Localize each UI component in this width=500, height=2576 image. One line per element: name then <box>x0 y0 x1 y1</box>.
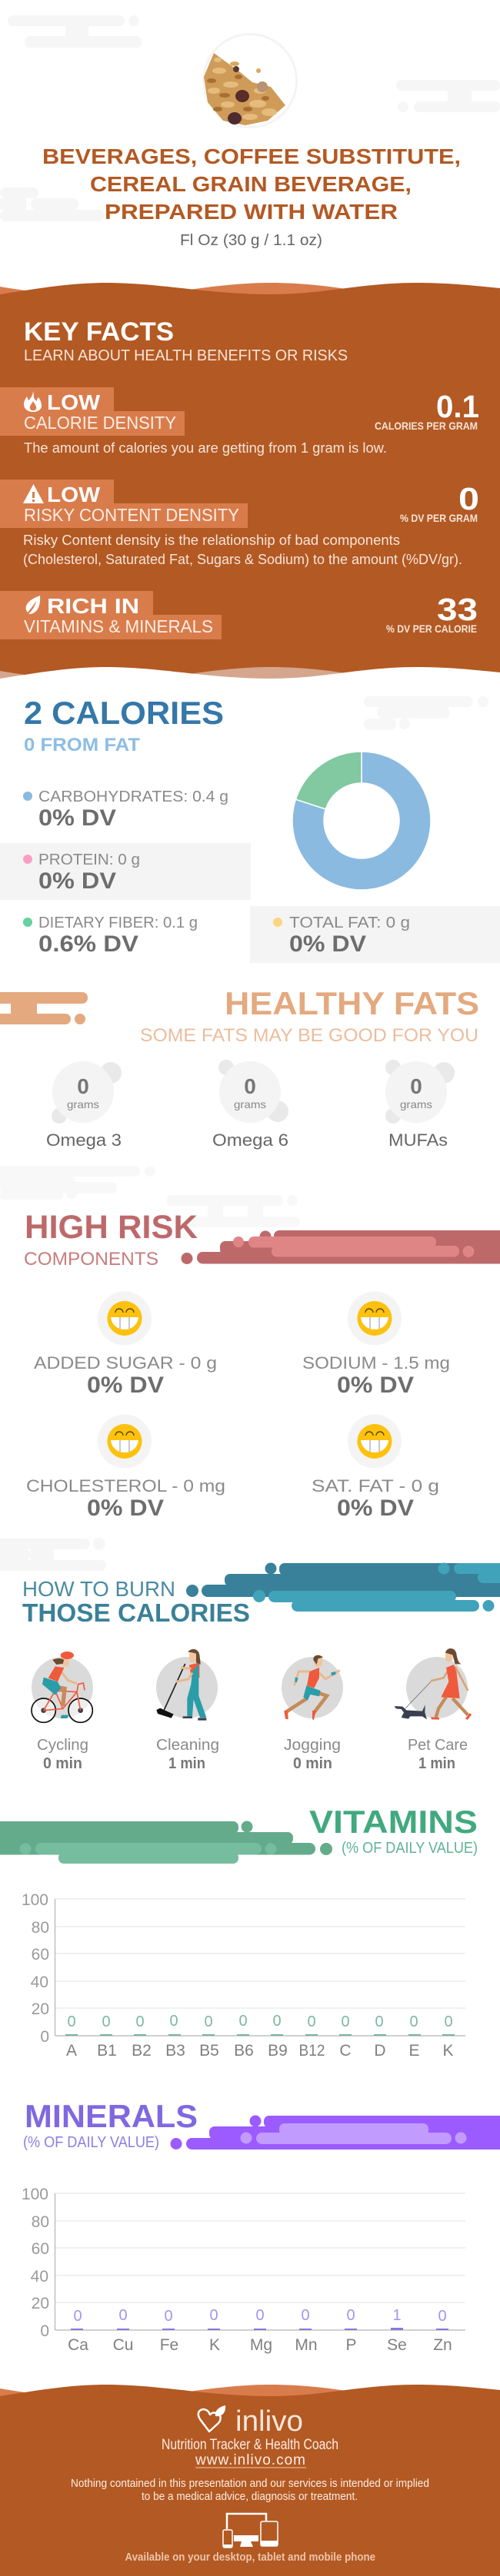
donut chart <box>292 752 431 890</box>
title: CEREAL GRAIN BEVERAGE, <box>90 172 412 196</box>
item: sodium: SODIUM - 1.5 mg <box>302 1353 450 1373</box>
heading: calories: 2 CALORIES <box>24 695 224 731</box>
bar chart: vitamins <box>22 1891 465 2060</box>
bar chart: minerals: 0 <box>255 2307 265 2324</box>
stat: mufas <box>385 1060 455 1150</box>
bar chart: vitamins: 0 <box>135 2013 145 2030</box>
heading: key facts: KEY FACTS <box>24 317 174 347</box>
bar chart: minerals: 60 <box>32 2240 49 2258</box>
panel: key facts <box>0 283 500 692</box>
panel: minerals <box>22 2098 500 2354</box>
item: saturated fat: 0% DV <box>337 1495 414 1521</box>
bar chart: minerals: 0 <box>209 2307 218 2324</box>
fact: calorie density <box>0 387 479 456</box>
icon: woman walking dog <box>395 1648 472 1720</box>
bar chart: vitamins: B2 <box>132 2042 152 2060</box>
bar chart: minerals: Mn <box>295 2336 318 2354</box>
bar chart: vitamins: B5 <box>199 2042 219 2060</box>
panel: footer <box>0 2385 500 2576</box>
bar chart: minerals: 0 <box>438 2308 447 2325</box>
item: added sugar <box>34 1291 217 1398</box>
bar chart: minerals: 80 <box>32 2213 49 2231</box>
activity: cleaning: Cleaning <box>156 1737 219 1754</box>
bar chart: minerals <box>22 2186 465 2354</box>
legend: total fat: 0% DV <box>289 931 366 957</box>
bar chart: minerals: Zn <box>433 2336 452 2354</box>
icon: flame <box>24 391 42 412</box>
panel: healthy fats <box>0 985 479 1150</box>
legend: carbohydrates: 0% DV <box>38 805 116 831</box>
website link: www.inlivo.com <box>195 2452 305 2468</box>
disclaimer <box>71 2477 429 2503</box>
fact: calorie density: 0.1 <box>436 389 479 424</box>
bar chart: vitamins: 0 <box>204 2013 213 2030</box>
fact: rich in vitamins and minerals <box>0 591 478 639</box>
fact: rich in vitamins and minerals: RICH IN <box>47 594 139 618</box>
bar chart: minerals: P <box>345 2336 357 2354</box>
stat: omega 6 <box>212 1060 288 1150</box>
activity: jogging: Jogging <box>284 1737 341 1754</box>
bar chart: vitamins: A <box>66 2042 77 2060</box>
fact: risky content density: LOW <box>47 483 101 506</box>
bar chart: vitamins: 100 <box>22 1891 48 1909</box>
item: saturated fat: SAT. FAT - 0 g <box>312 1476 439 1495</box>
activity: jogging: 0 min <box>293 1755 332 1772</box>
header section <box>0 15 500 249</box>
activity: cleaning <box>156 1649 219 1772</box>
bar chart: vitamins: B9 <box>268 2042 288 2060</box>
item: added sugar: ADDED SUGAR - 0 g <box>34 1353 217 1373</box>
bar chart: minerals: 20 <box>32 2295 49 2312</box>
legend: carbohydrates <box>23 788 228 831</box>
item: cholesterol: CHOLESTEROL - 0 mg <box>26 1476 225 1495</box>
availability note: Available on your desktop, tablet and mobile phone <box>125 2551 375 2564</box>
stat: omega 3: Omega 3 <box>46 1130 122 1150</box>
fact: calorie density: CALORIE DENSITY <box>24 413 176 433</box>
fact: risky content density: RISKY CONTENT DENSITY <box>24 505 239 525</box>
stat: omega 3: 0 <box>77 1074 89 1098</box>
icon: grinning face <box>108 1301 142 1336</box>
bar chart: minerals: Ca <box>68 2336 88 2354</box>
logo: inlivo: inlivo <box>235 2405 303 2438</box>
stat: omega 6: 0 <box>244 1074 256 1098</box>
item: cholesterol <box>26 1414 225 1521</box>
fact: rich in vitamins and minerals: 33 <box>437 592 478 627</box>
item: cholesterol: 0% DV <box>87 1495 164 1521</box>
panel: calories <box>0 695 500 963</box>
activity: cycling <box>32 1651 93 1772</box>
activity: cleaning: 1 min <box>168 1755 205 1772</box>
fact: rich in vitamins and minerals: VITAMINS & MINERALS <box>24 616 213 636</box>
fact: calorie density: CALORIES PER GRAM <box>375 420 478 432</box>
legend: protein <box>0 843 251 900</box>
logo: inlivo <box>198 2405 303 2438</box>
bar chart: minerals: 0 <box>301 2307 310 2324</box>
legend: total fat <box>250 906 500 963</box>
legend: total fat: TOTAL FAT: 0 g <box>289 915 410 931</box>
item: saturated fat <box>312 1414 439 1521</box>
fact: calorie density: The amount of calories you are getting from 1 gram is low. <box>24 440 387 456</box>
heading: how to burn: HOW TO BURN <box>22 1577 175 1601</box>
bar chart: minerals: 100 <box>22 2186 48 2203</box>
icon: jogger <box>282 1655 343 1721</box>
icon: grinning face <box>357 1424 392 1459</box>
bar chart: vitamins: 0 <box>102 2013 111 2030</box>
icon: leaf <box>26 596 40 614</box>
title: BEVERAGES, COFFEE SUBSTITUTE, <box>42 144 461 168</box>
item: sodium: 0% DV <box>337 1373 414 1398</box>
activity: cycling: 0 min <box>43 1755 82 1772</box>
bar chart: vitamins: 60 <box>32 1946 49 1964</box>
bar chart: minerals: 1 <box>392 2307 402 2324</box>
panel: vitamins <box>0 1804 478 2060</box>
bar chart: vitamins: K <box>442 2042 454 2060</box>
bar chart: vitamins: B6 <box>234 2042 254 2060</box>
activity: cycling: Cycling <box>37 1737 88 1754</box>
subheading: components: COMPONENTS <box>24 1249 158 1270</box>
food image: granola <box>203 34 297 128</box>
decoration: high risk stripes <box>182 1230 500 1264</box>
heading: minerals: MINERALS <box>25 2098 198 2134</box>
bar chart: vitamins: B3 <box>165 2042 185 2060</box>
item: sodium <box>302 1291 450 1398</box>
title <box>42 144 461 224</box>
fact: risky content density <box>0 480 479 567</box>
bar chart: vitamins: B1 <box>97 2042 117 2060</box>
fact: risky content density: 0 <box>458 481 479 516</box>
bar chart: vitamins: C <box>339 2042 352 2060</box>
item: added sugar: 0% DV <box>87 1373 164 1398</box>
decoration: burn stripes <box>186 1563 500 1612</box>
heading: healthy fats: HEALTHY FATS <box>225 985 479 1021</box>
stat: omega 3: grams <box>67 1098 99 1110</box>
icon: warning triangle <box>23 484 44 503</box>
bar chart: vitamins: B12 <box>298 2042 325 2060</box>
icon: grinning face <box>108 1424 142 1459</box>
decoration: vitamin stripes <box>0 1821 332 1864</box>
bar chart: minerals: 0 <box>73 2308 82 2325</box>
bar chart: vitamins: D <box>374 2042 386 2060</box>
heading: high risk: HIGH RISK <box>25 1209 198 1246</box>
icon: grinning face <box>357 1301 392 1336</box>
fact: rich in vitamins and minerals: % DV PER CALORIE <box>386 622 477 635</box>
activity: pet care: Pet Care <box>408 1737 468 1754</box>
bar chart: minerals: 0 <box>118 2307 128 2324</box>
bar chart: minerals: 0 <box>164 2308 173 2325</box>
subheading: LEARN ABOUT HEALTH BENEFITS OR RISKS <box>24 347 348 364</box>
bar chart: minerals: 40 <box>31 2268 48 2286</box>
icon: cyclist <box>32 1651 93 1722</box>
bar chart: vitamins: 20 <box>32 2000 49 2018</box>
fact: risky content density: Risky Content density is the relationship of bad components <box>23 533 400 548</box>
stat: omega 6: grams <box>234 1098 266 1110</box>
bar chart: minerals: Mg <box>250 2336 272 2354</box>
legend: carbohydrates: CARBOHYDRATES: 0.4 g <box>38 788 228 805</box>
tagline: Nutrition Tracker & Health Coach <box>162 2437 338 2453</box>
bar chart: vitamins: 0 <box>341 2013 350 2030</box>
bar chart: vitamins: E <box>408 2042 420 2060</box>
fact: calorie density: LOW <box>47 390 101 414</box>
activity: pet care: 1 min <box>418 1755 455 1772</box>
bar chart: minerals: 0 <box>346 2307 355 2324</box>
bar chart: vitamins: 0 <box>375 2013 384 2030</box>
disclaimer: to be a medical advice, diagnosis or treatment. <box>142 2490 358 2503</box>
legend: dietary fiber <box>23 915 198 957</box>
panel: high risk components <box>0 1166 500 1521</box>
stat: mufas: MUFAs <box>388 1130 448 1150</box>
bar chart: minerals: Fe <box>160 2336 178 2354</box>
bar chart: vitamins: 0 <box>272 2013 282 2030</box>
bar chart: vitamins: 40 <box>31 1973 48 1991</box>
heading: vitamins: VITAMINS <box>309 1804 478 1840</box>
panel: how to burn those calories <box>0 1538 500 1772</box>
bar chart: vitamins: 0 <box>169 2013 178 2030</box>
title: PREPARED WITH WATER <box>105 200 398 224</box>
disclaimer: Nothing contained in this presentation and our services is intended or implied <box>71 2477 429 2490</box>
legend: dietary fiber: 0.6% DV <box>38 931 138 957</box>
bar chart: vitamins: 0 <box>307 2013 316 2030</box>
bar chart: minerals: Se <box>387 2336 407 2354</box>
decoration: healthy fats stripes <box>0 992 88 1024</box>
bar chart: vitamins: 80 <box>32 1919 49 1937</box>
activity: pet care <box>395 1648 472 1772</box>
subheading: from fat: 0 FROM FAT <box>24 735 140 755</box>
bar chart: vitamins: 0 <box>67 2013 76 2030</box>
bar chart: vitamins: 0 <box>409 2013 418 2030</box>
legend: protein: 0% DV <box>38 868 116 894</box>
serving size: Fl Oz (30 g / 1.1 oz) <box>180 232 322 249</box>
legend: protein: PROTEIN: 0 g <box>38 851 140 868</box>
bar chart: minerals: 0 <box>40 2322 49 2340</box>
bar chart: minerals: K <box>209 2336 220 2354</box>
decoration: mineral stripes <box>171 2115 500 2149</box>
stat: omega 6: Omega 6 <box>212 1130 288 1150</box>
stat: mufas: 0 <box>410 1074 422 1098</box>
stat: mufas: grams <box>400 1098 432 1110</box>
bar chart: vitamins: 0 <box>40 2028 49 2046</box>
subheading: percent of daily value: (% OF DAILY VALUE) <box>23 2134 159 2151</box>
activity: jogging <box>282 1655 343 1772</box>
subheading: SOME FATS MAY BE GOOD FOR YOU <box>140 1025 478 1046</box>
stat: omega 3 <box>46 1061 122 1150</box>
icon: devices <box>223 2514 278 2548</box>
bar chart: vitamins: 0 <box>238 2013 248 2030</box>
icon: woman sweeping <box>156 1649 218 1721</box>
heading: those calories: THOSE CALORIES <box>22 1598 250 1627</box>
subheading: percent of daily value: (% OF DAILY VALUE) <box>342 1840 478 1857</box>
legend: dietary fiber: DIETARY FIBER: 0.1 g <box>38 915 198 931</box>
bar chart: minerals: Cu <box>113 2336 133 2354</box>
bar chart: vitamins: 0 <box>444 2013 453 2030</box>
fact: risky content density: (Cholesterol, Saturated Fat, Sugars & Sodium) to the amount (%DV/gr). <box>23 552 462 567</box>
fact: risky content density: % DV PER GRAM <box>400 512 478 524</box>
